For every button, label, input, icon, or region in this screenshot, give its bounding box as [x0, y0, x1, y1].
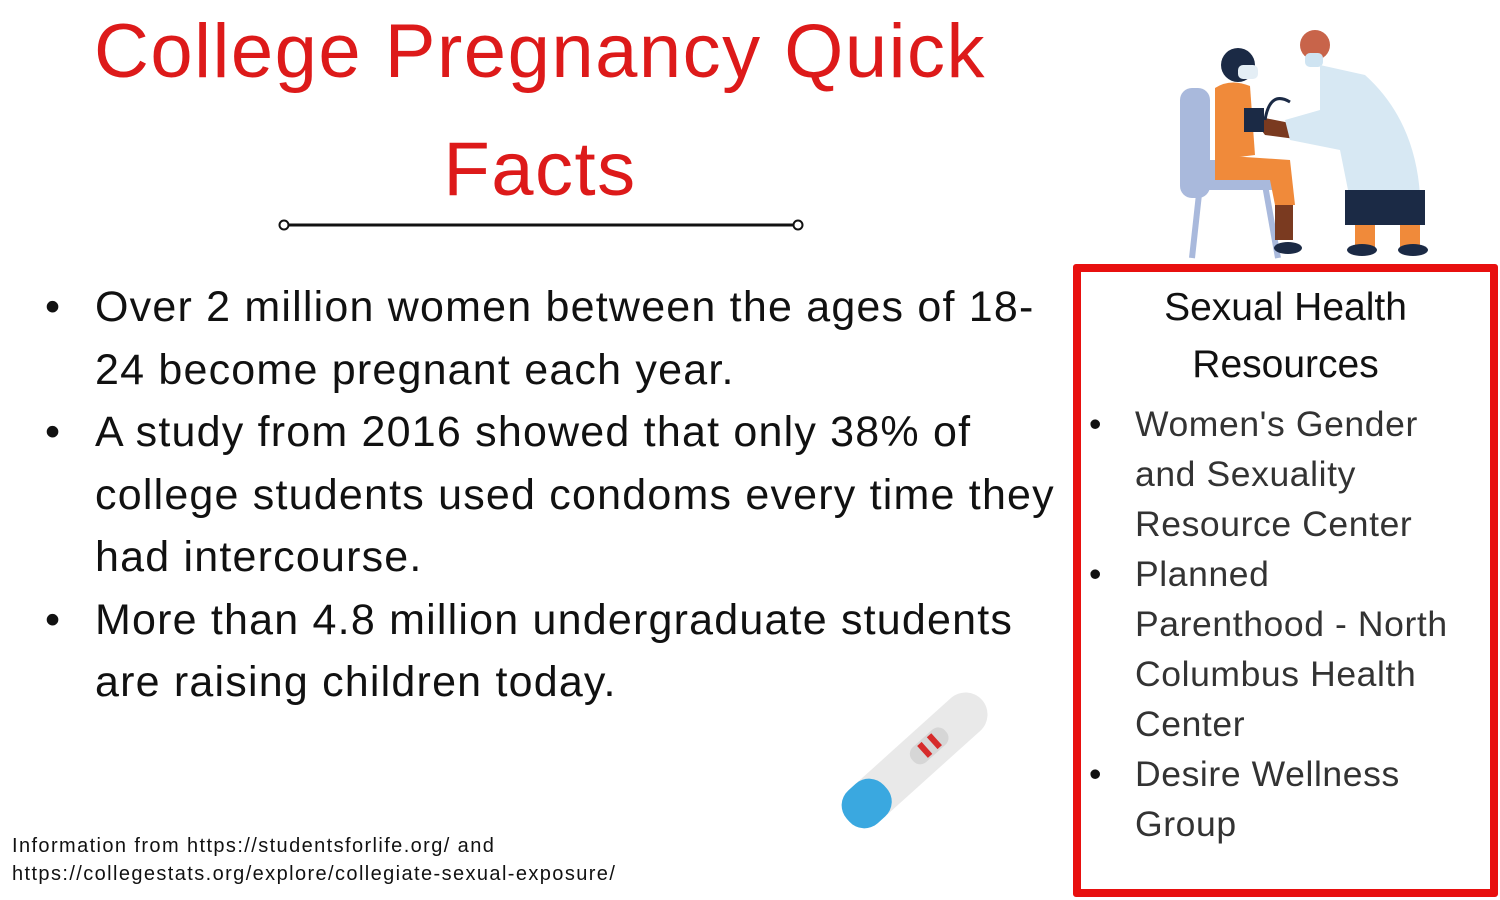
facts list	[46, 283, 1055, 706]
source footnote: https://collegestats.org/explore/collegiate-sexual-exposure/	[12, 863, 616, 885]
facts list: are raising children today.	[95, 658, 617, 706]
facts list: Over 2 million women between the ages of 18-	[95, 283, 1035, 331]
facts list: had intercourse.	[95, 533, 423, 581]
resources list: Group	[1135, 804, 1237, 844]
box heading	[1164, 286, 1407, 386]
icon: pregnancy test	[842, 692, 988, 828]
facts list: college students used condoms every time they	[95, 470, 1055, 518]
facts list: A study from 2016 showed that only 38% of	[95, 408, 971, 456]
resources list: Center	[1135, 704, 1245, 744]
title: College Pregnancy Quick	[94, 9, 986, 94]
resources list	[1090, 404, 1448, 844]
facts list: 24 become pregnant each year.	[95, 346, 735, 394]
box heading: Resources	[1192, 343, 1379, 386]
title underline	[278, 220, 804, 230]
title: Facts	[443, 127, 637, 212]
resources box	[1073, 264, 1498, 897]
resources list: Parenthood - North	[1135, 604, 1448, 644]
box heading: Sexual Health	[1164, 286, 1407, 329]
source footnote	[12, 835, 616, 885]
resources list: Planned	[1135, 554, 1269, 594]
illustration: doctor and patient	[1180, 30, 1428, 258]
resources list: Desire Wellness	[1135, 754, 1400, 794]
resources list: Resource Center	[1135, 504, 1412, 544]
resources list: Columbus Health	[1135, 654, 1416, 694]
title	[94, 9, 986, 212]
source footnote: Information from https://studentsforlife.org/ and	[12, 835, 495, 857]
resources list: Women's Gender	[1135, 404, 1418, 444]
resources list: and Sexuality	[1135, 454, 1356, 494]
facts list: More than 4.8 million undergraduate students	[95, 596, 1013, 644]
